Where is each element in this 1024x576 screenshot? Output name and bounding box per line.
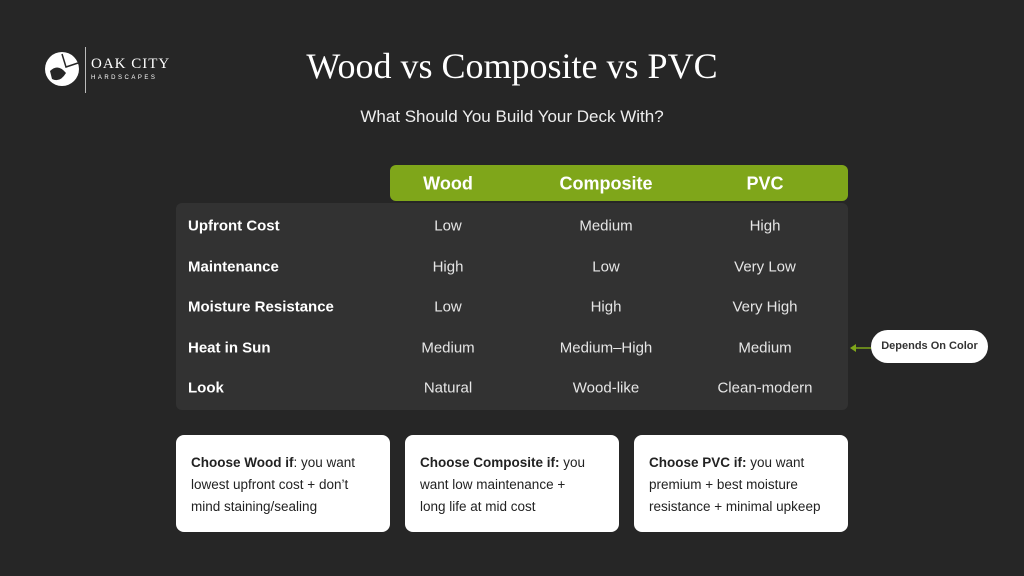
text: High (433, 258, 463, 276)
logo: OAK CITY (91, 56, 170, 72)
text: Look (188, 380, 224, 396)
card composite: Choose Composite if: you (420, 455, 585, 470)
text: Medium–High (560, 340, 652, 356)
text: Clean-modern (717, 380, 813, 396)
table body (176, 203, 848, 410)
logo: HARDSCAPES (91, 75, 157, 81)
text: Low (592, 258, 620, 276)
text: Maintenance (188, 258, 279, 276)
card pvc: premium + best moisture (649, 477, 798, 492)
card wood (176, 435, 390, 532)
text: Wood-like (573, 380, 639, 396)
card pvc (634, 435, 848, 532)
subtitle: What Should You Build Your Deck With? (360, 107, 664, 126)
text: Low (434, 218, 462, 234)
table header: PVC (746, 174, 784, 194)
table header (390, 165, 848, 201)
table header: Composite (559, 174, 653, 194)
text: Moisture Resistance (188, 298, 334, 316)
card composite (405, 435, 619, 532)
text: Low (434, 298, 462, 316)
callout: Depends On Color (881, 340, 978, 352)
title: Wood vs Composite vs PVC (306, 46, 718, 86)
text: Upfront Cost (188, 218, 280, 234)
logo (45, 47, 170, 93)
card pvc: Choose PVC if: you want (649, 455, 804, 470)
card wood: lowest upfront cost + don’t (191, 477, 348, 492)
text: Heat in Sun (188, 340, 271, 356)
card wood: mind staining/sealing (191, 499, 317, 514)
card pvc: resistance + minimal upkeep (649, 499, 820, 514)
text: Medium (738, 340, 792, 356)
arrow (850, 344, 872, 352)
text: Very Low (734, 258, 796, 276)
text: Very High (732, 298, 798, 316)
table header: Wood (423, 174, 473, 194)
card composite: long life at mid cost (420, 499, 536, 514)
text: High (591, 298, 621, 316)
text: Natural (424, 380, 472, 396)
card wood: Choose Wood if: you want (191, 455, 355, 470)
text: Medium (421, 340, 475, 356)
callout (871, 330, 988, 363)
text: High (750, 218, 780, 234)
text: Medium (579, 218, 633, 234)
card composite: want low maintenance + (420, 477, 565, 492)
